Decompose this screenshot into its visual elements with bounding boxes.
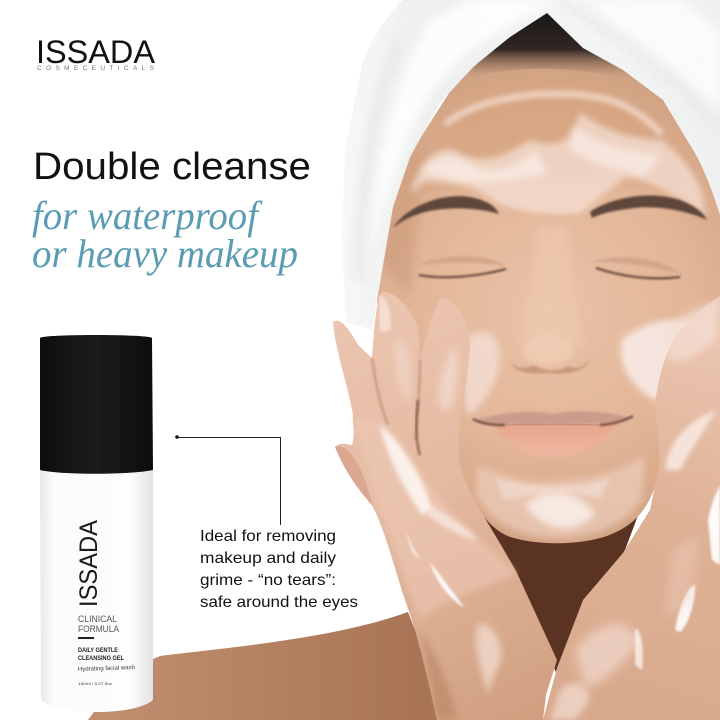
callout text: grime - “no tears”: xyxy=(200,572,336,589)
vertical brand name: ISSADA xyxy=(75,520,103,607)
neck shadow xyxy=(480,510,640,680)
right eye xyxy=(592,257,682,278)
towel fold on right xyxy=(590,0,720,110)
product bottle xyxy=(40,335,153,712)
right hand xyxy=(543,296,720,720)
right hand foam xyxy=(665,410,716,470)
clinical formula: FORMULA xyxy=(78,624,119,634)
callout text: safe around the eyes xyxy=(200,594,358,611)
towel fold highlight xyxy=(372,0,560,250)
clinical formula xyxy=(78,614,119,634)
right shoulder xyxy=(660,560,720,720)
left eyebrow xyxy=(393,196,499,228)
callout leader line xyxy=(175,435,280,525)
clinical formula: CLINICAL xyxy=(78,614,117,624)
back fingers and palm xyxy=(333,292,557,720)
subheading line 2: or heavy makeup xyxy=(32,231,298,276)
finger side shadow xyxy=(416,400,420,455)
callout text xyxy=(200,528,358,611)
towel wrap xyxy=(342,0,720,330)
headline xyxy=(32,146,311,276)
volume: 150ml / 5.07 floz xyxy=(78,681,112,686)
front finger xyxy=(354,417,517,620)
left eye xyxy=(418,256,506,277)
headline: Double cleanse: Double cleanse xyxy=(33,146,311,188)
nose highlight xyxy=(518,225,585,348)
right eyebrow xyxy=(590,196,707,220)
rear finger shadow xyxy=(335,447,372,505)
lower wrist shading xyxy=(420,630,458,720)
left hand xyxy=(333,292,557,720)
forehead tone xyxy=(405,85,695,195)
product name: CLEANSING GEL xyxy=(78,656,124,662)
towel shade xyxy=(358,40,400,280)
product name: DAILY GENTLE xyxy=(78,648,118,654)
temple shading left xyxy=(380,140,425,300)
wordmark: ISSADA xyxy=(36,34,156,70)
foam on fingers xyxy=(380,425,432,515)
callout text: makeup and daily xyxy=(200,550,336,567)
hair xyxy=(462,12,640,85)
finger gaps xyxy=(372,358,420,440)
lips xyxy=(473,411,633,457)
bottle divider bar xyxy=(78,637,94,639)
product name xyxy=(78,648,124,662)
tagline: COSMECEUTICALS xyxy=(37,65,155,72)
towel terry texture xyxy=(360,0,720,330)
brand logo xyxy=(36,34,156,72)
foam: forehead xyxy=(410,94,705,215)
subheading line 1: for waterproof xyxy=(32,193,263,238)
bottle cap xyxy=(40,335,153,474)
bottle body xyxy=(40,470,153,712)
face xyxy=(375,10,720,543)
product descriptor: Hydrating facial wash xyxy=(78,665,135,673)
foam: left cheek xyxy=(463,332,500,415)
nose tip and nostrils xyxy=(510,335,590,374)
callout text: Ideal for removing xyxy=(200,528,336,545)
towel fold shadow xyxy=(560,0,720,130)
left shoulder xyxy=(88,612,450,720)
foam: right cheek xyxy=(621,320,695,402)
foam: chin xyxy=(476,455,645,538)
